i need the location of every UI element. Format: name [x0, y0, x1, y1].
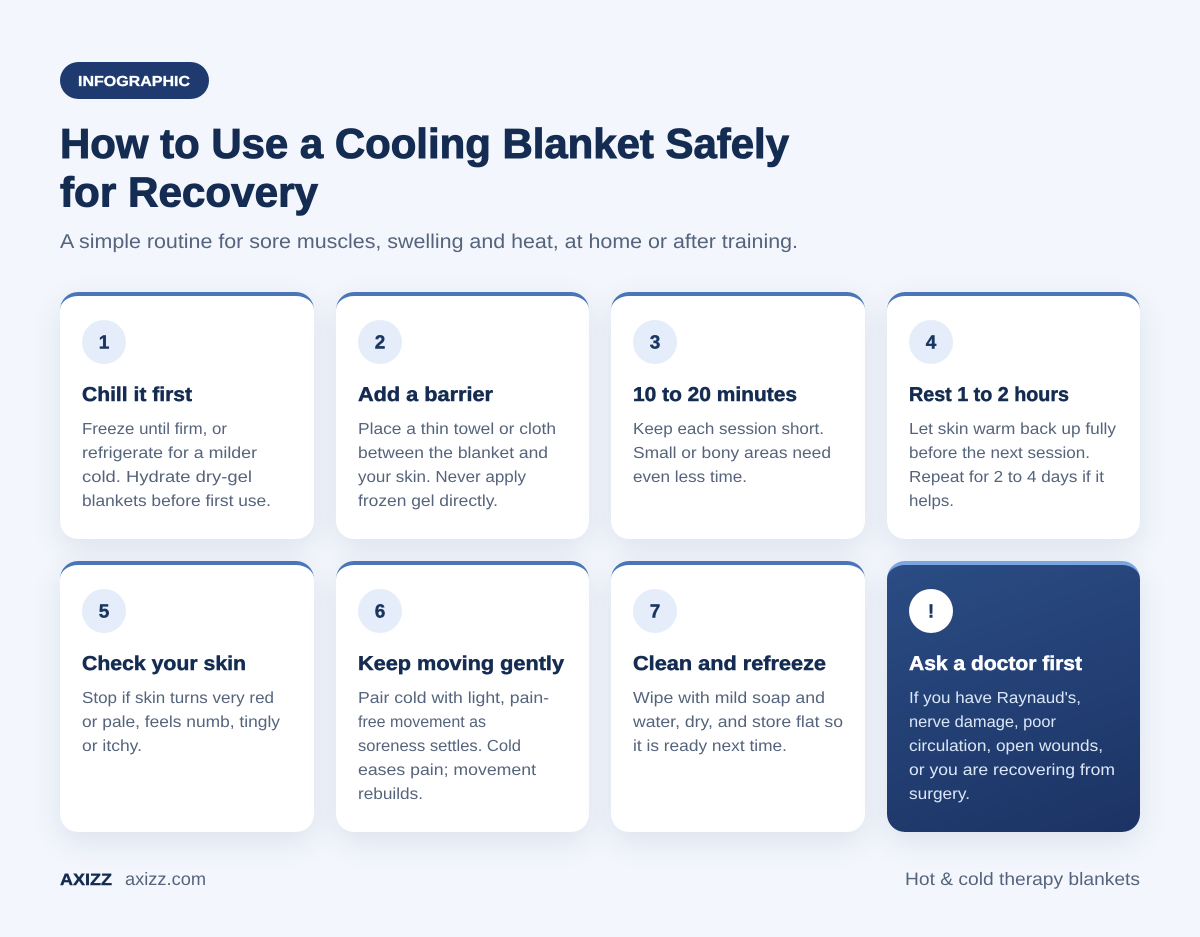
step number 4: 4: [925, 332, 936, 354]
panel: step 4: [886, 292, 1140, 539]
icon: exclamation mark: !: [927, 602, 934, 622]
body text: Keep each session short.: [633, 421, 824, 438]
body text: frozen gel directly.: [358, 493, 498, 510]
body text: your skin. Never apply: [358, 469, 526, 486]
body text: it is ready next time.: [633, 738, 787, 755]
panel: step 2: [336, 292, 589, 539]
body text: Stop if skin turns very red: [82, 690, 274, 707]
body text: Place a thin towel or cloth: [358, 421, 555, 438]
step number 6: [358, 589, 402, 633]
heading: clean and refreeze: Clean and refreeze: [633, 653, 826, 675]
body text: [908, 421, 1116, 510]
heading: ask a doctor first: Ask a doctor first: [908, 653, 1082, 675]
body text: Pair cold with light, pain-: [358, 690, 548, 707]
body text: soreness settles. Cold: [358, 738, 520, 755]
body text: [82, 690, 280, 755]
body text: even less time.: [633, 469, 747, 486]
panel: step 5: [60, 561, 314, 832]
body text: [82, 421, 271, 510]
step number 3: 3: [650, 332, 660, 354]
body text: [633, 421, 831, 486]
heading: 10 to 20 minutes: 10 to 20 minutes: [633, 384, 797, 406]
body text: surgery.: [908, 786, 970, 803]
body text: nerve damage, poor: [908, 714, 1056, 731]
body text: rebuilds.: [358, 786, 422, 803]
step number 5: [82, 589, 126, 633]
body text: or you are recovering from: [908, 762, 1114, 779]
title: [60, 120, 790, 216]
body text: cold. Hydrate dry-gel: [82, 469, 252, 486]
body text: Let skin warm back up fully: [908, 421, 1115, 438]
badge: [60, 62, 209, 99]
step number 7: 7: [650, 602, 660, 622]
footer: tagline: Hot & cold therapy blankets: [905, 869, 1140, 889]
body text: [358, 421, 556, 510]
step number 6: 6: [374, 602, 385, 622]
heading: chill it first: Chill it first: [82, 384, 192, 406]
step number 1: [82, 320, 126, 364]
body text: before the next session.: [908, 445, 1090, 462]
icon: exclamation mark: [908, 589, 952, 633]
step number 2: [358, 320, 402, 364]
step number 4: [908, 320, 952, 364]
body text: water, dry, and store flat so: [632, 714, 843, 731]
panel: step 1: [60, 292, 314, 539]
heading: rest 1 to 2 hours: Rest 1 to 2 hours: [908, 384, 1068, 406]
title: for Recovery: [60, 168, 319, 216]
body text: [632, 690, 843, 755]
heading: check your skin: Check your skin: [82, 653, 246, 675]
body text: refrigerate for a milder: [82, 445, 258, 462]
body text: or pale, feels numb, tingly: [82, 714, 280, 731]
step number 7: [633, 589, 677, 633]
title: How to Use a Cooling Blanket Safely: [60, 120, 790, 167]
body text: [358, 690, 548, 803]
panel: warning, ask a doctor first: [886, 561, 1140, 832]
body text: Wipe with mild soap and: [633, 690, 825, 707]
panel: step 6: [336, 561, 589, 832]
body text: If you have Raynaud's,: [908, 690, 1080, 707]
body text: Small or bony areas need: [633, 445, 831, 462]
body text: Repeat for 2 to 4 days if it: [908, 469, 1104, 486]
heading: add a barrier: Add a barrier: [358, 384, 493, 406]
body text: circulation, open wounds,: [908, 738, 1102, 755]
step number 1: 1: [99, 332, 110, 354]
body text: helps.: [908, 493, 954, 510]
body text: free movement as: [358, 714, 486, 731]
footer: brand: [60, 869, 206, 889]
heading: keep moving gently: Keep moving gently: [358, 653, 564, 675]
step number 5: 5: [99, 602, 110, 622]
subtitle: A simple routine for sore muscles, swelling and heat, at home or after training.: [60, 231, 798, 253]
step number 3: [633, 320, 677, 364]
body text: eases pain; movement: [358, 762, 536, 779]
body text: [908, 690, 1114, 803]
footer: brand: AXIZZ: [60, 871, 112, 889]
panel: step 3: [611, 292, 864, 539]
panel: step 7: [611, 561, 864, 832]
body text: Freeze until firm, or: [82, 421, 228, 438]
body text: or itchy.: [82, 738, 142, 755]
body text: between the blanket and: [358, 445, 547, 462]
body text: blankets before first use.: [82, 493, 271, 510]
badge: INFOGRAPHIC: [78, 74, 191, 90]
step number 2: 2: [374, 332, 385, 354]
footer: brand: axizz.com: [125, 869, 206, 889]
